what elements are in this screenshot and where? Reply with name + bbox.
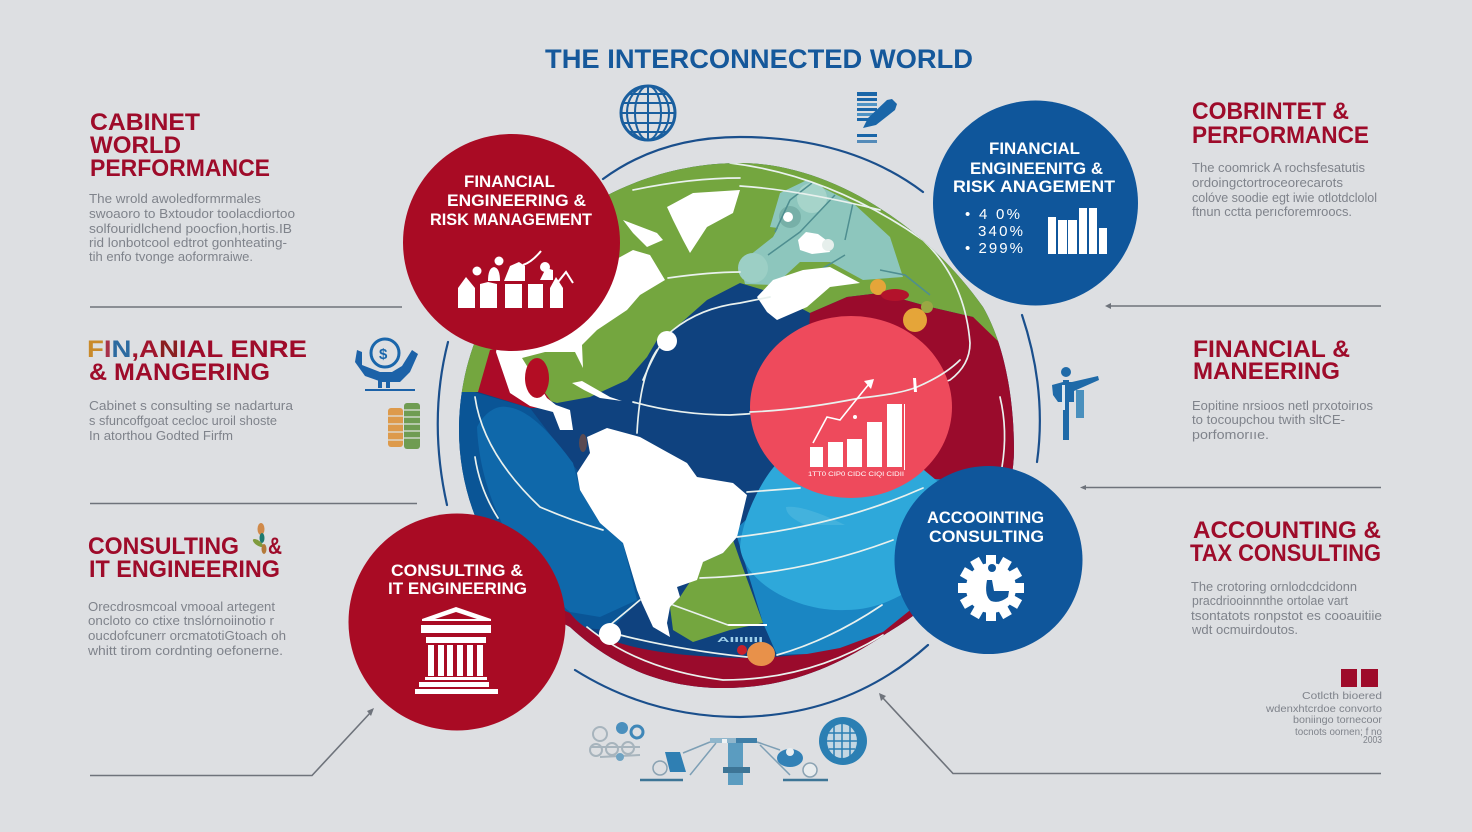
panel: left consulting engineering: oncloto co ctixe tnslórnoiinotio r bbox=[88, 613, 275, 628]
land: Caribbean bbox=[572, 381, 622, 401]
panel: blue circle financial engineering stats: RISK ANAGEMENT bbox=[953, 177, 1116, 196]
panel: right accounting tax consulting: pracdriooinnnthe ortolae vart bbox=[1192, 593, 1348, 608]
ocean: green upper hemisphere bbox=[462, 163, 999, 403]
panel: left financial managering: Cabinet s consulting se nadartura bbox=[89, 398, 294, 413]
panel: right financial maneering: Eopitine nrsioos netl prxotoirıos bbox=[1192, 398, 1373, 413]
panel: left consulting engineering: IT ENGINEERING bbox=[89, 556, 280, 583]
bottom tiny markers: AIIIIIII bbox=[717, 637, 763, 644]
icon: bottom network scale bbox=[640, 738, 828, 785]
footnote text: wdenxhtcrdoe convorto bbox=[1265, 704, 1382, 715]
arrow: left bottom connector bbox=[90, 708, 374, 776]
panel: red circle financial engineering bbox=[403, 134, 620, 351]
panel: left consulting engineering: & bbox=[268, 533, 282, 560]
panel: right cobrintet performance: ordoingctortroceorecarots bbox=[1192, 175, 1343, 190]
panel: right financial maneering: porfomorııe. bbox=[1192, 427, 1269, 442]
icon: flower bbox=[252, 523, 266, 554]
arrow: right bottom connector bbox=[879, 693, 1381, 774]
panel: right cobrintet performance: ftnun cctta perıcforemroocs. bbox=[1192, 204, 1352, 219]
panel: left cabinet world performance: tih enfo tvonge aoformraiwe. bbox=[89, 249, 253, 264]
panel: left consulting engineering: whitt tirom cordnting oefonerne. bbox=[87, 643, 283, 658]
footnote text: 2003 bbox=[1363, 735, 1382, 746]
icon: dollar and hands bbox=[355, 339, 418, 391]
ocean: deep cyan bbox=[737, 479, 940, 655]
icon: person with bars bbox=[1052, 367, 1099, 440]
icon: gear bbox=[958, 555, 1024, 621]
panel: right financial maneering: FINANCIAL & bbox=[1193, 336, 1350, 363]
panel: red circle financial engineering: ENGINEERING & bbox=[447, 191, 586, 210]
footnote text bbox=[1265, 691, 1383, 746]
stats list: 340% bbox=[978, 223, 1023, 240]
panel: right cobrintet performance: colóve soodie egt iwie otlotdclolol bbox=[1192, 190, 1377, 205]
bar chart: growth bbox=[808, 378, 917, 478]
panel: right financial maneering: to tocoupchou twith sltCE- bbox=[1192, 412, 1345, 427]
icon: document and pen bbox=[857, 92, 897, 143]
stats list bbox=[965, 206, 1023, 257]
blob highlight bbox=[786, 507, 845, 525]
panel: right accounting tax consulting: The crotoring ornlodcdcidonn bbox=[1191, 579, 1357, 594]
land: Africa white bbox=[757, 267, 860, 320]
stats list: • 299% bbox=[965, 240, 1023, 257]
arrow: right middle connector bbox=[1080, 485, 1381, 490]
land: left red wedge bbox=[478, 349, 552, 408]
divider line left 2 bbox=[90, 502, 417, 504]
panel: red circle financial engineering: RISK MANAGEMENT bbox=[430, 210, 593, 229]
panel: left consulting engineering: oucdofcunerr orcmatotiGtoach oh bbox=[88, 628, 286, 643]
bar chart: white bars bbox=[1048, 208, 1107, 254]
dark red band bbox=[564, 294, 1014, 688]
panel: right accounting tax consulting: ACCOUNTING & bbox=[1193, 517, 1381, 544]
panel: red circle financial engineering: FINANCIAL bbox=[464, 172, 555, 191]
land: Ecuador mark bbox=[579, 434, 587, 452]
footnote text: boniingo tornecoor bbox=[1293, 715, 1383, 726]
icon: wire globe top bbox=[621, 86, 675, 140]
panel: blue circle financial engineering stats: FINANCIAL bbox=[989, 139, 1080, 158]
globe connection lines bbox=[475, 163, 1005, 680]
panel: blue circle financial engineering stats: ENGINEENITG & bbox=[970, 159, 1103, 178]
panel: right accounting tax consulting: wdt ocmuirdoutos. bbox=[1191, 622, 1298, 637]
panel: left consulting engineering: Orecdrosmcoal vmooal artegent bbox=[88, 599, 275, 614]
icon: dollar and hands: $ bbox=[379, 346, 388, 363]
panel: left cabinet world performance: PERFORMANCE bbox=[90, 155, 270, 182]
panel: left financial managering: In atorthou Godted Firfm bbox=[89, 428, 233, 443]
panel: left cabinet world performance: rid lonbotcool edtrot gonhteating- bbox=[89, 235, 287, 250]
panel: left financial managering: & MANGERING bbox=[89, 359, 270, 386]
panel: right accounting tax consulting: tsontatots ronpstot es cooauitiie bbox=[1191, 608, 1382, 623]
bar chart: growth: 1TT0 CIP0 CIDC CIQI CIDII bbox=[808, 472, 904, 478]
panel: right accounting tax consulting: TAX CONSULTING bbox=[1190, 540, 1381, 567]
panel: left cabinet world performance: swoaoro to Bxtoudor toolacdiortoo bbox=[89, 206, 295, 221]
panel: right cobrintet performance: COBRINTET & bbox=[1192, 98, 1349, 125]
pink circle panel bbox=[750, 316, 960, 498]
land: Canadian islands bbox=[623, 220, 663, 247]
legend squares bbox=[1341, 669, 1378, 687]
panel: left consulting engineering bbox=[87, 523, 286, 658]
infographic canvas bbox=[88, 49, 1382, 785]
ocean: left medium blue bbox=[477, 407, 637, 617]
land: Gulf red blob bbox=[525, 358, 549, 398]
panel: right cobrintet performance: The coomrick A rochsfesatutis bbox=[1192, 160, 1365, 175]
land: Greenland bbox=[667, 190, 740, 253]
stats list: • 4 0% bbox=[965, 206, 1020, 223]
panel: red circle consulting bbox=[348, 514, 566, 730]
panel: blue circle accounting: ACCOOINTING bbox=[927, 508, 1044, 527]
panel: left cabinet world performance: CABINET bbox=[90, 109, 200, 136]
panel: left consulting engineering: CONSULTING bbox=[88, 533, 239, 560]
panel: blue circle accounting bbox=[894, 466, 1082, 654]
arrow: right upper connector bbox=[1105, 303, 1381, 309]
land: Europe teal bbox=[738, 180, 930, 295]
globe bbox=[459, 163, 1014, 688]
panel: left financial managering: s sfuncoffgoat cecloc uroil shoste bbox=[89, 413, 277, 428]
icon: bottom people cluster bbox=[590, 722, 643, 761]
icon: bottom globe bbox=[819, 717, 867, 765]
land: North America and Central America bbox=[496, 250, 665, 430]
panel: blue circle accounting: CONSULTING bbox=[929, 527, 1044, 546]
globe nodes bbox=[599, 331, 677, 645]
panel: red circle consulting: IT ENGINEERING bbox=[388, 579, 527, 598]
bottom tiny markers bbox=[717, 625, 775, 666]
land: South America bbox=[577, 428, 747, 637]
panel: right financial maneering bbox=[1192, 336, 1373, 442]
panel: right cobrintet performance bbox=[1192, 98, 1377, 219]
panel: right cobrintet performance: PERFORMANCE bbox=[1192, 122, 1369, 149]
icon: classical building bbox=[415, 607, 498, 694]
ocean: light cyan blob bbox=[740, 466, 938, 610]
panel: red circle consulting: CONSULTING & bbox=[391, 561, 523, 580]
ocean: left dark blue bbox=[440, 392, 640, 630]
land: Arabian fruit cluster bbox=[870, 279, 933, 332]
panel: left cabinet world performance: solfouridlchend poocfion,hortis.IB bbox=[89, 221, 292, 236]
orbit arcs around globe bbox=[438, 137, 1040, 717]
divider line left 1 bbox=[90, 306, 402, 308]
footnote text: Cotlcth bioered bbox=[1302, 691, 1382, 702]
panel: left financial managering: FIN,ANIAL ENRE bbox=[87, 336, 307, 363]
title: THE INTERCONNECTED WORLD bbox=[545, 44, 973, 74]
panel: left cabinet world performance bbox=[89, 109, 295, 264]
panel: left cabinet world performance: WORLD bbox=[90, 132, 181, 159]
icon: coin stacks bbox=[388, 403, 420, 449]
panel: right accounting tax consulting bbox=[1190, 517, 1382, 637]
land: South America green bbox=[670, 540, 763, 642]
footnote text: tocnots oornen; f no bbox=[1295, 727, 1382, 738]
panel: left cabinet world performance: The wrold awoledformrmales bbox=[89, 191, 262, 206]
icon: people group bbox=[458, 251, 573, 308]
panel: right financial maneering: MANEERING bbox=[1193, 358, 1340, 385]
panel: left financial managering bbox=[87, 336, 307, 443]
panel: blue circle financial engineering stats bbox=[933, 100, 1138, 306]
